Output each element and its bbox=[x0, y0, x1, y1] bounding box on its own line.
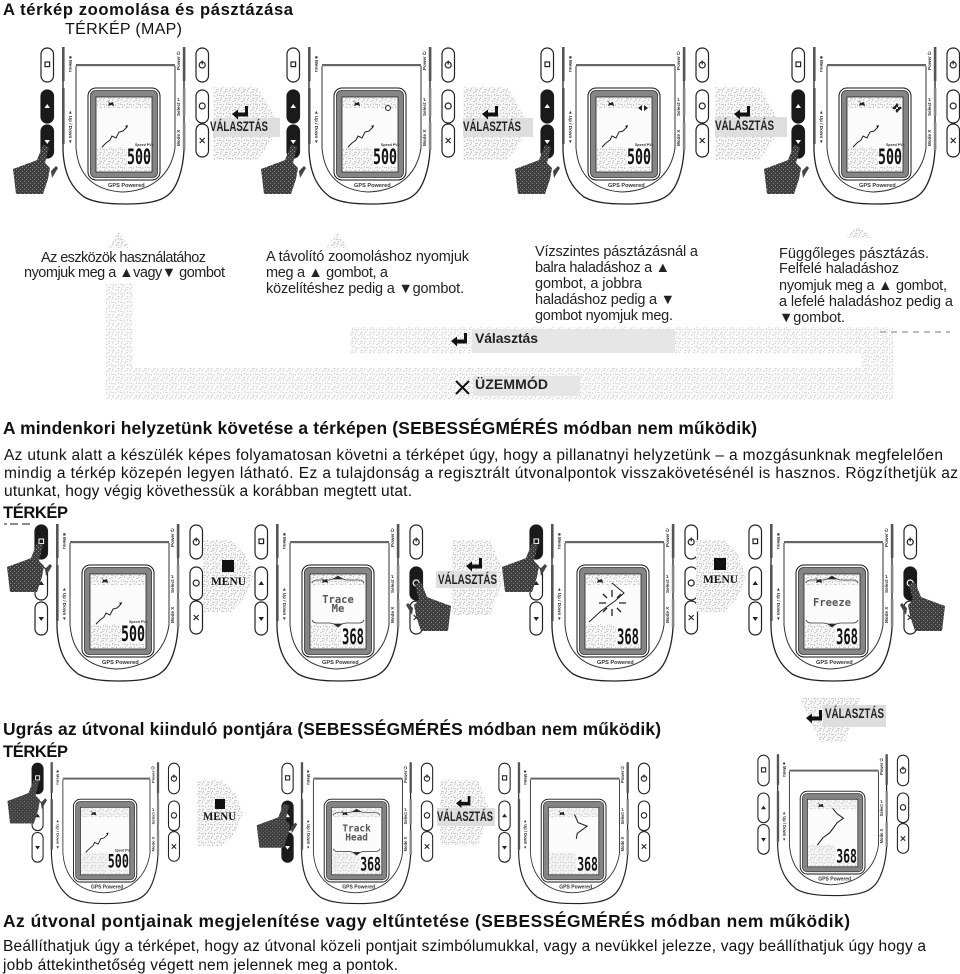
arrow: select 5 bbox=[800, 698, 886, 742]
device labels: Select ↵ bbox=[170, 574, 175, 593]
device labels: Power ⏻ bbox=[390, 528, 395, 547]
screen: Trace Me: Trace bbox=[322, 594, 354, 606]
caption 3 bbox=[535, 244, 699, 324]
device labels: ■ Menu bbox=[306, 770, 311, 785]
caption 4: ▼gombot. bbox=[779, 310, 845, 326]
device labels: GPS Powered bbox=[608, 183, 645, 189]
screen: horizontal pan: Speed PVs bbox=[635, 143, 654, 147]
screen: map at 500 bbox=[96, 577, 148, 646]
caption 2: közelítéshez pedig a ▼gombot. bbox=[266, 281, 464, 297]
device labels: Power ⏻ bbox=[665, 528, 670, 547]
screen: vertical pan bbox=[853, 100, 905, 169]
device labels bbox=[782, 757, 884, 882]
title: A térkép zoomolása és pásztázása bbox=[3, 0, 294, 19]
screen: map at 500: 500 bbox=[108, 851, 129, 873]
device labels: Select ↵ bbox=[620, 808, 625, 824]
device labels: GPS Powered bbox=[859, 183, 896, 189]
arrow: select 1 bbox=[210, 87, 280, 160]
caption 4: nyomjuk meg a ▲ gombot, bbox=[779, 278, 947, 294]
device labels: ◄ Up / Down ► bbox=[523, 819, 528, 850]
device labels: Power ⏻ bbox=[170, 528, 175, 547]
device labels bbox=[557, 528, 670, 666]
arrow: menu 2: MENU bbox=[703, 572, 738, 586]
device row 2, step 3 bbox=[502, 524, 698, 681]
device labels: Mode X bbox=[927, 129, 932, 146]
arrow: menu 1 bbox=[203, 540, 253, 612]
arrow: menu 1: MENU bbox=[211, 574, 246, 588]
hand pressing select bbox=[406, 582, 451, 631]
device labels: Mode X bbox=[665, 606, 670, 623]
device labels bbox=[306, 765, 408, 890]
caption 4: a lefelé haladáshoz pedig a bbox=[779, 294, 954, 310]
screen: full track bbox=[817, 802, 857, 867]
device labels: ■ Menu bbox=[782, 762, 787, 777]
device labels: Select ↵ bbox=[403, 808, 408, 824]
screen: vertical pan: 500 bbox=[878, 145, 902, 169]
paragraph: tracking bbox=[4, 447, 958, 500]
device labels: GPS Powered bbox=[818, 876, 851, 882]
caption 4: Felfelé haladáshoz bbox=[779, 261, 899, 277]
mode label: select: Választás bbox=[475, 330, 538, 346]
screen: map at 500: 500 bbox=[127, 145, 151, 169]
device labels: ◄ Up / Down ► bbox=[68, 110, 73, 144]
device labels: Power ⏻ bbox=[150, 765, 155, 783]
caption 3: gombot nyomjuk meg. bbox=[535, 308, 673, 324]
arrow: select 1: VÁLASZTÁS bbox=[210, 118, 268, 134]
arrow: select 5: VÁLASZTÁS bbox=[825, 705, 884, 721]
device labels: Mode X bbox=[176, 129, 181, 146]
screen: zoom map: 500 bbox=[373, 145, 397, 169]
caption 2 bbox=[266, 249, 470, 297]
arrow: select 2: VÁLASZTÁS bbox=[463, 118, 521, 134]
device labels: Power ⏻ bbox=[422, 51, 427, 70]
hand pressing menu bbox=[502, 543, 547, 592]
paragraph: track points: Beállíthatjuk úgy a térképet, hogy az útvonal közeli pontjait szimbólumukkal, vagy a nevükkel jelezze, vagy beállíthatjuk úgy hogy a bbox=[3, 938, 926, 955]
device labels bbox=[62, 528, 175, 666]
paragraph: track points: jobb áttekinthetőség végett nem jelennek meg a pontok. bbox=[2, 957, 398, 974]
screen: track start: 368 bbox=[577, 853, 598, 875]
screen: vertical pan: Speed PVs bbox=[886, 143, 905, 147]
device labels: GPS Powered bbox=[816, 660, 853, 666]
device row 1, step 4 bbox=[764, 47, 960, 204]
device labels: ■ Menu bbox=[62, 533, 67, 549]
device labels: Select ↵ bbox=[879, 800, 884, 816]
device labels: Mode X bbox=[676, 129, 681, 146]
device labels: Select ↵ bbox=[422, 97, 427, 116]
device labels: Power ⏻ bbox=[403, 765, 408, 783]
mode label: mode bbox=[456, 375, 580, 396]
device labels: Select ↵ bbox=[927, 97, 932, 116]
caption 2: A távolító zoomoláshoz nyomjuk bbox=[266, 249, 470, 265]
arrow: select 6 bbox=[437, 780, 495, 845]
device labels: ◄ Up / Down ► bbox=[56, 819, 61, 850]
screen: Freeze: Freeze bbox=[813, 597, 851, 609]
hand pressing button bbox=[257, 804, 297, 848]
device row 3, step 4 bbox=[758, 754, 909, 896]
device labels: GPS Powered bbox=[108, 183, 145, 189]
device labels: GPS Powered bbox=[559, 884, 592, 890]
device labels: Power ⏻ bbox=[176, 51, 181, 70]
screen: full track: 368 bbox=[836, 845, 857, 867]
screen: Trace Me: Me bbox=[332, 603, 344, 615]
device labels: GPS Powered bbox=[91, 884, 123, 890]
device row 1, step 2 bbox=[261, 47, 454, 204]
device row 3, step 2 bbox=[257, 762, 433, 904]
device labels: Select ↵ bbox=[390, 574, 395, 593]
device labels: GPS Powered bbox=[102, 660, 139, 666]
screen: Track Head: Head bbox=[345, 833, 368, 844]
caption 4: Függőleges pásztázás. bbox=[779, 246, 929, 262]
device labels: ◄ Up / Down ► bbox=[782, 811, 787, 842]
caption 3: balra haladáshoz a ▲ bbox=[535, 260, 670, 276]
hand pressing menu bbox=[7, 543, 52, 592]
hand pressing button bbox=[13, 145, 58, 194]
arrow: menu 2 bbox=[696, 540, 746, 612]
device labels: Select ↵ bbox=[150, 808, 155, 824]
label: map: TÉRKÉP bbox=[3, 742, 68, 761]
device labels bbox=[282, 528, 395, 666]
screen: Track Head: 368 bbox=[360, 853, 381, 875]
hand pressing select bbox=[900, 582, 945, 631]
heading: jump to start: Ugrás az útvonal kiinduló pontjára (SEBESSÉGMÉRÉS módban nem működik) bbox=[3, 719, 661, 739]
screen: start burst bbox=[589, 577, 639, 649]
device labels: ◄ Up / Down ► bbox=[568, 110, 573, 144]
screen: zoom map bbox=[348, 100, 400, 169]
device labels: ■ Menu bbox=[68, 56, 73, 72]
subtitle: map mode: TÉRKÉP (MAP) bbox=[65, 19, 182, 38]
paragraph: tracking: utunkat, hogy végig követhessük a korábban megtett utat. bbox=[4, 483, 412, 500]
device labels: GPS Powered bbox=[597, 660, 634, 666]
device labels bbox=[776, 528, 889, 666]
device row 1, step 1 bbox=[13, 47, 208, 204]
screen: map at 500: Speed PVs bbox=[115, 848, 131, 852]
device labels: ◄ Up / Down ► bbox=[282, 587, 287, 621]
device labels: ◄ Up / Down ► bbox=[314, 110, 319, 144]
arrow: select 4 bbox=[436, 540, 505, 615]
hand pressing button bbox=[261, 145, 306, 194]
caption 3: gombot, a jobbra bbox=[535, 276, 643, 292]
device labels: ■ Menu bbox=[819, 56, 824, 72]
arrow: select 4: VÁLASZTÁS bbox=[438, 571, 497, 587]
caption 1: nyomjuk meg a ▲vagy▼ gombot bbox=[24, 265, 225, 281]
paragraph: tracking: Az utunk alatt a készülék képes folyamatosan követni a térképet úgy, hogy a pillanatnyi helyzetünk – a mozgásunknak megfelelően bbox=[4, 447, 943, 464]
device labels: Power ⏻ bbox=[676, 51, 681, 70]
device labels: Mode X bbox=[620, 836, 625, 851]
caption 2: meg a ▲ gombot, a bbox=[266, 265, 389, 281]
hand pressing button bbox=[764, 145, 809, 194]
device labels: Select ↵ bbox=[884, 574, 889, 593]
label: map: TÉRKÉP bbox=[3, 503, 68, 522]
device row 1, step 3 bbox=[515, 47, 708, 204]
arrow: select 3: VÁLASZTÁS bbox=[715, 117, 774, 133]
screen: map at 500 bbox=[102, 100, 154, 169]
device labels: Mode X bbox=[150, 836, 155, 851]
device labels bbox=[314, 51, 427, 189]
device row 3, step 1 bbox=[7, 762, 179, 904]
caption 3: haladáshoz pedig a ▼ bbox=[535, 292, 675, 308]
caption 3: Vízszintes pásztázásnál a bbox=[535, 244, 699, 260]
screen: horizontal pan bbox=[602, 100, 654, 169]
screen: Freeze: 368 bbox=[836, 625, 858, 649]
device row 3, step 3 bbox=[499, 762, 650, 904]
screen: zoom map: Speed PVs bbox=[381, 143, 400, 147]
screen: Trace Me: 368 bbox=[342, 625, 364, 649]
device labels: Mode X bbox=[422, 129, 427, 146]
screen: map at 500: Speed PVs bbox=[135, 143, 154, 147]
textured frame connecting the modes bbox=[105, 226, 950, 400]
arrow: menu 3 bbox=[197, 780, 243, 846]
device labels: ◄ Up / Down ► bbox=[819, 110, 824, 144]
device labels: ◄ Up / Down ► bbox=[557, 587, 562, 621]
hand pressing button bbox=[515, 145, 560, 194]
screen: horizontal pan: 500 bbox=[627, 145, 651, 169]
device labels: ■ Menu bbox=[523, 770, 528, 785]
screen: start burst: 368 bbox=[617, 625, 639, 649]
screen: map at 500: Speed PVs bbox=[129, 620, 148, 624]
caption 1: Az eszközök használatához bbox=[41, 250, 206, 266]
arrow: menu 3: MENU bbox=[203, 809, 236, 823]
device labels: Power ⏻ bbox=[927, 51, 932, 70]
device labels: ■ Menu bbox=[568, 56, 573, 72]
heading: tracking: A mindenkori helyzetünk követése a térképen (SEBESSÉGMÉRÉS módban nem működik) bbox=[3, 418, 757, 438]
device labels: Mode X bbox=[884, 606, 889, 623]
device labels: Select ↵ bbox=[676, 97, 681, 116]
device labels: ■ Menu bbox=[314, 56, 319, 72]
device labels: Power ⏻ bbox=[620, 765, 625, 783]
screen: map at 500 bbox=[86, 810, 131, 873]
device labels: Mode X bbox=[390, 606, 395, 623]
device labels: Select ↵ bbox=[176, 97, 181, 116]
device labels: ◄ Up / Down ► bbox=[62, 587, 67, 621]
paragraph: track points bbox=[2, 938, 926, 974]
device labels: Mode X bbox=[879, 828, 884, 843]
device labels: Power ⏻ bbox=[879, 757, 884, 775]
device labels: Mode X bbox=[403, 836, 408, 851]
mode label: select bbox=[451, 329, 675, 353]
arrow: select 3 bbox=[715, 87, 787, 160]
screen: Track Head: Track bbox=[342, 824, 371, 835]
arrow: select 2 bbox=[463, 87, 533, 160]
device labels bbox=[568, 51, 681, 189]
screen: Freeze bbox=[806, 576, 858, 649]
device labels: GPS Powered bbox=[342, 884, 375, 890]
device labels: Select ↵ bbox=[665, 574, 670, 593]
device labels bbox=[68, 51, 181, 189]
caption 1 bbox=[24, 250, 225, 281]
device row 2, step 1 bbox=[7, 524, 202, 681]
arrow: select 6: VÁLASZTÁS bbox=[437, 808, 493, 824]
hand pressing menu bbox=[7, 779, 47, 824]
paragraph: tracking: mindig a térkép közepén legyen látható. Ez a tulajdonság a regisztrált útvonalpontok visszakövetésénél is hasznos. Rögzíthetjük az bbox=[4, 465, 958, 482]
device row 2, step 4 bbox=[749, 524, 945, 681]
device labels: ■ Menu bbox=[282, 533, 287, 549]
device labels: Power ⏻ bbox=[884, 528, 889, 547]
device labels: ■ Menu bbox=[56, 770, 61, 785]
device labels: Mode X bbox=[170, 606, 175, 623]
device labels: GPS Powered bbox=[322, 660, 359, 666]
device labels: ◄ Up / Down ► bbox=[306, 819, 311, 850]
device labels: ■ Menu bbox=[776, 533, 781, 549]
device labels: ◄ Up / Down ► bbox=[776, 587, 781, 621]
screen: track start bbox=[558, 810, 598, 875]
device row 2, step 2 bbox=[255, 524, 451, 681]
device labels bbox=[819, 51, 932, 189]
screen: Track Head bbox=[333, 809, 381, 875]
device labels: ■ Menu bbox=[557, 533, 562, 549]
mode label: mode: ÜZEMMÓD bbox=[475, 375, 548, 392]
device labels bbox=[56, 765, 155, 890]
screen: map at 500: 500 bbox=[121, 622, 145, 646]
device labels bbox=[523, 765, 625, 890]
caption 4 bbox=[779, 246, 954, 326]
screen: Trace Me bbox=[312, 576, 364, 649]
heading: track points: Az útvonal pontjainak megjelenítése vagy eltűntetése (SEBESSÉGMÉRÉS módban nem működik) bbox=[3, 911, 850, 931]
device labels: GPS Powered bbox=[354, 183, 391, 189]
